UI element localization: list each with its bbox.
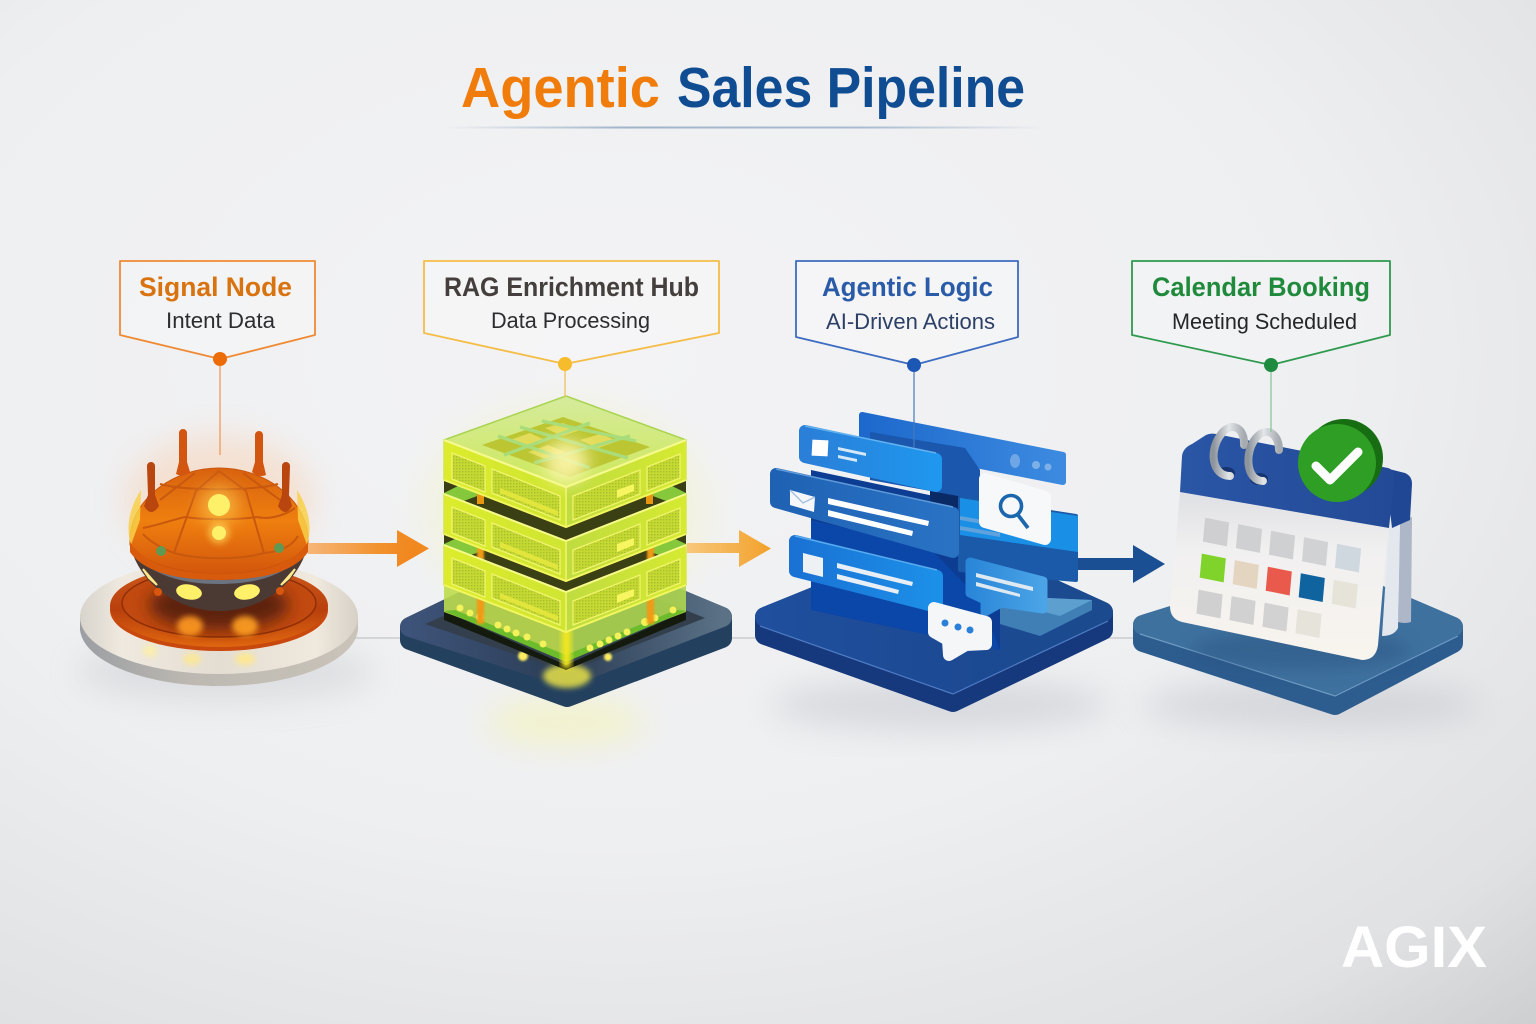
- icon: server tier 2: [444, 480, 686, 581]
- callout: calendar booking: Calendar Booking: [1152, 272, 1370, 302]
- icon: slate base: [1140, 570, 1458, 705]
- title: Agentic: [461, 56, 660, 120]
- arrow: signal to enrichment: [308, 530, 429, 567]
- callout: agentic logic: [796, 261, 1018, 448]
- icon: dark column: [811, 470, 1000, 650]
- icon: green check badge: [1298, 419, 1383, 502]
- title: [461, 56, 1025, 120]
- icon: date grid: [1196, 518, 1361, 645]
- icon: small bubble: [970, 562, 1043, 612]
- icon: list card: [795, 536, 937, 607]
- icon: search card: [985, 479, 1045, 539]
- icon: calendar page: [1170, 434, 1394, 660]
- title: Sales Pipeline: [677, 56, 1025, 120]
- icon: binder rings: [1214, 427, 1279, 485]
- callout: agentic logic: Agentic Logic: [822, 272, 993, 302]
- icon: server lower glass: [444, 585, 686, 670]
- icon: top card: [805, 426, 936, 486]
- stage: signal node: [75, 429, 375, 702]
- icon: saucer body: [128, 468, 310, 611]
- callout: signal node: Signal Node: [139, 272, 292, 302]
- icon: orange plate: [110, 565, 328, 651]
- callout: RAG enrichment hub: [424, 261, 719, 397]
- icon: navy base: [760, 542, 1108, 702]
- icon: back browser panel: [862, 415, 1063, 500]
- icon: mail card: [776, 469, 953, 552]
- dome ribs: [143, 471, 298, 558]
- callout: RAG enrichment hub: Data Processing: [491, 308, 650, 333]
- stage: RAG enrichment hub: [410, 396, 722, 746]
- icon: back pages: [1382, 468, 1412, 636]
- callout: signal node: Intent Data: [166, 308, 276, 333]
- callout: agentic logic: AI-Driven Actions: [826, 309, 995, 334]
- stage: calendar booking: [1140, 419, 1480, 729]
- callout: signal node: [120, 261, 315, 455]
- icon: slab: [1000, 596, 1092, 636]
- icon: silver disc: [80, 560, 358, 686]
- callout: calendar booking: Meeting Scheduled: [1172, 309, 1357, 334]
- stage: agentic logic: [760, 415, 1110, 731]
- callout: calendar booking: [1132, 261, 1390, 432]
- icon: right panel: [960, 498, 1078, 580]
- icon: dark base: [410, 552, 722, 697]
- arrow: enrichment to logic: [687, 530, 771, 567]
- arrow: logic to calendar: [1078, 545, 1165, 583]
- logo: AGIX: AGIX: [1341, 915, 1487, 980]
- icon: chat bubble: [934, 608, 986, 655]
- icon: server tier 1: [444, 396, 686, 527]
- icon: server tier 3: [444, 530, 686, 632]
- callout: RAG enrichment hub: RAG Enrichment Hub: [444, 272, 699, 302]
- icon: antennas: [144, 429, 292, 512]
